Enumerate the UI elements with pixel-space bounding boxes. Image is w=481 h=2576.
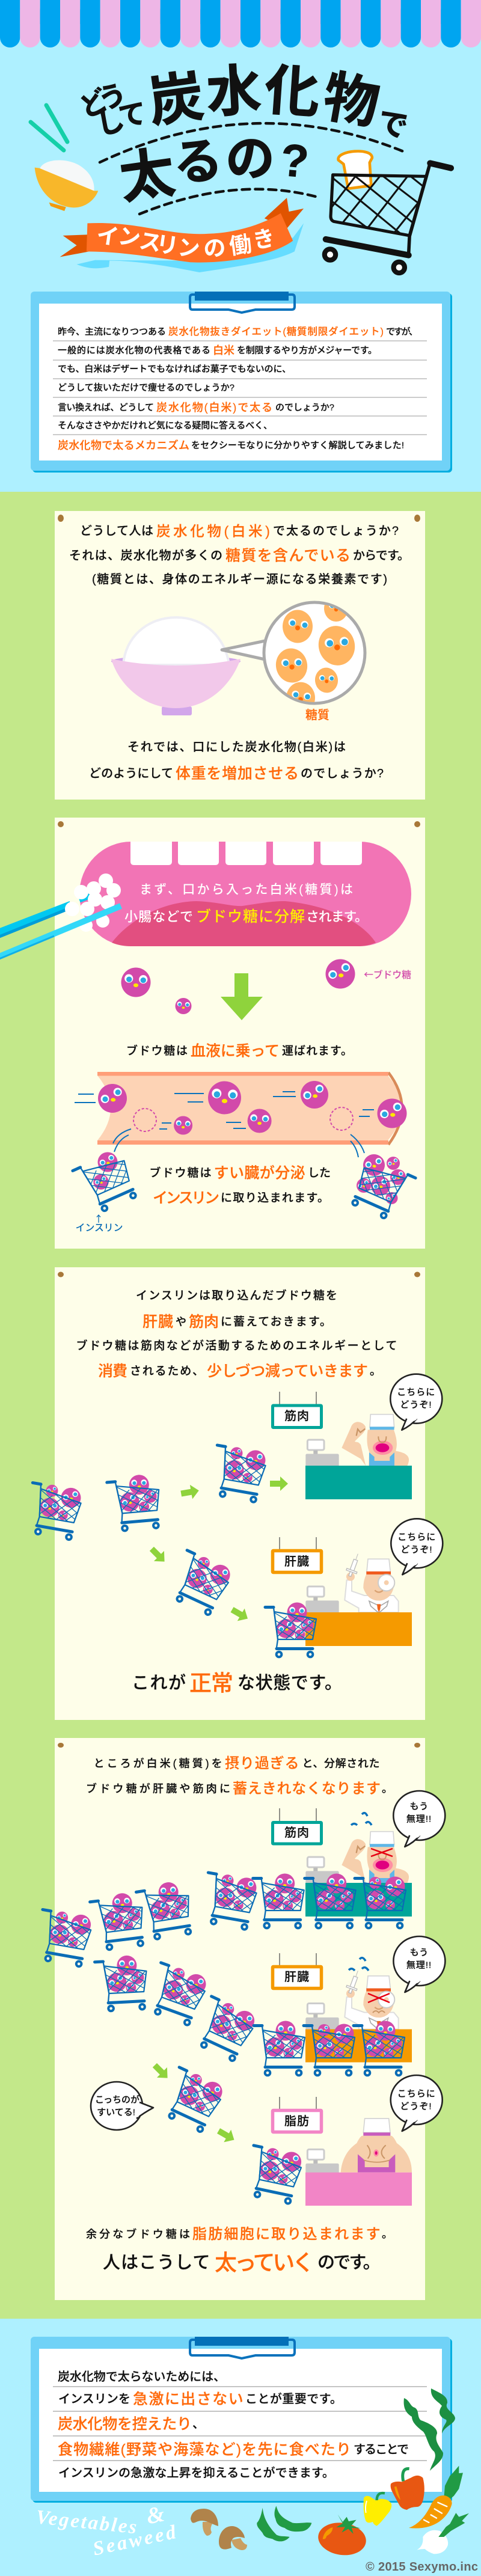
speech bubble: this way: どうぞ! [400, 1545, 433, 1555]
text block: why: 糖質を含んでいる [225, 547, 351, 564]
text block: why: からです。 [353, 549, 409, 563]
text block: question: どのようにして [89, 766, 173, 780]
intro text: 昨今、主流になりつつある [58, 327, 166, 337]
advice text: 炭水化物で太らないためには、 [58, 2370, 225, 2384]
title: し [94, 105, 127, 141]
label: sugar: 糖質 [305, 708, 329, 722]
speech bubble: no more: もう [410, 1801, 429, 1812]
ribbon: insulin subtitle: ン [177, 235, 201, 262]
panel: intro clipboard [31, 292, 452, 473]
text: this is normal [132, 1671, 342, 1695]
speech bubble: this way [391, 1519, 443, 1574]
speech bubble: this way: どうぞ! [400, 2102, 432, 2111]
icon: carrot [409, 2466, 463, 2529]
sign: liver: 肝臓 [284, 1970, 310, 1984]
intro text: 白米 [213, 344, 234, 356]
text block: question [89, 740, 384, 782]
title: 炭 [144, 66, 208, 134]
text block: why [69, 523, 409, 586]
title [75, 60, 411, 210]
cart queue row 3 [158, 2064, 311, 2206]
awning stripes [0, 0, 481, 47]
label: insulin: ↑ [94, 1212, 103, 1225]
arrows [150, 2060, 237, 2146]
ribbon: insulin subtitle: イ [95, 222, 120, 250]
intro text: をセクシーモなりに分かりやすく解説してみました! [191, 440, 404, 451]
text block: storage: 筋肉 [189, 1314, 219, 1330]
text block: taken up by insulin: インスリン [153, 1190, 219, 1207]
text block: why: (糖質とは、身体のエネルギー源になる栄養素です) [92, 572, 387, 586]
text block: overeating: ところが白米(糖質)を [94, 1757, 222, 1770]
sign: muscle: 筋肉 [284, 1409, 310, 1423]
sign: muscle [273, 1808, 321, 1844]
glucose characters [121, 959, 355, 1014]
text block: digestion into glucose: ブドウ糖に分解 [196, 908, 305, 925]
icon: mushrooms [191, 2509, 247, 2550]
carts flow [24, 1442, 323, 1657]
sign: fat [273, 2097, 321, 2132]
intro text: 炭水化物抜きダイエット(糖質制限ダイエット) [168, 325, 384, 337]
text block: getting fat: 余分なブドウ糖は [86, 2228, 190, 2241]
text block: getting fat: のです。 [317, 2253, 381, 2272]
arrow: down [221, 973, 263, 1020]
text: this is normal: 正常 [189, 1671, 233, 1695]
text block: storage [76, 1288, 397, 1380]
speech bubble: this one is empty: こっちのが [95, 2094, 139, 2105]
icon: mouth [79, 842, 411, 946]
icon: seaweed [404, 2388, 455, 2471]
text block: taken up by insulin: した [308, 1167, 331, 1179]
text: this is normal: な状態です。 [237, 1673, 342, 1693]
text block: getting fat: 脂肪細胞に取り込まれます [192, 2226, 381, 2242]
decorative script: Vegetables and Seaweed: Vegetables [35, 2506, 138, 2538]
title: ? [278, 135, 311, 188]
speech bubble: this one is empty: すいてる! [97, 2108, 135, 2117]
title: 水 [204, 60, 263, 124]
text block: overeating: と、分解された [302, 1758, 380, 1770]
speech bubble: this way: こちらに [397, 1532, 436, 1543]
ribbon: insulin subtitle: 働 [228, 231, 253, 259]
intro text: どうして抜いただけで痩せるのでしょうか? [58, 382, 234, 393]
text block: overeating: 摂り過ぎる [225, 1755, 299, 1772]
text block: getting fat: 太っていく [215, 2251, 314, 2275]
panel: digestion [0, 818, 425, 1249]
text block: storage: や [176, 1316, 186, 1328]
advice text: 急激に出さない [133, 2391, 244, 2408]
advice text: 炭水化物を控えたり [58, 2416, 192, 2433]
sign: muscle: 筋肉 [284, 1826, 310, 1840]
muscle clerk at counter [305, 1415, 412, 1499]
text block: carried by blood: 運ばれます。 [282, 1044, 352, 1057]
title: る [171, 133, 225, 192]
title: 太 [115, 142, 179, 210]
ribbon: insulin subtitle [60, 198, 304, 272]
advice text: ことが重要です。 [245, 2392, 342, 2406]
speech bubble: no more: もう [410, 1948, 429, 1957]
text block: getting fat: 。 [382, 2229, 393, 2241]
ribbon: insulin subtitle: リ [155, 231, 180, 259]
ribbon: insulin subtitle: ス [137, 228, 164, 256]
text block: taken up by insulin: ブドウ糖は [149, 1166, 212, 1179]
icon: insulin cart left [72, 1144, 146, 1216]
text block: digestion into glucose [124, 883, 368, 925]
title: で [374, 105, 411, 144]
speech bubble: this way: こちらに [397, 1387, 435, 1397]
title: の [224, 131, 276, 188]
panel: overeating [34, 1738, 445, 2300]
text block: taken up by insulin: に取り込まれます。 [221, 1192, 329, 1205]
cart queue row 1 [34, 1870, 412, 1969]
text block: getting fat [86, 2226, 393, 2275]
text block: carried by blood: 血液に乗って [191, 1042, 280, 1059]
text block: storage: 少しづつ減っていきます [207, 1363, 368, 1380]
panel: advice clipboard [31, 2337, 452, 2503]
label: insulin [76, 1212, 123, 1234]
icon: yellow pepper [364, 2493, 391, 2526]
text block: question: それでは、口にした炭水化物(白米)は [127, 740, 346, 754]
intro text [58, 325, 418, 451]
advice text: 食物繊維(野菜や海藻など)を先に食べたり [58, 2441, 351, 2458]
advice text: インスリンの急激な上昇を抑えることができます。 [58, 2466, 334, 2480]
magnifier bubble with sugar faces [220, 601, 367, 705]
intro text: 炭水化物で太るメカニズム [58, 439, 189, 451]
panel: why carbs [55, 511, 425, 800]
icon: insulin cart right [343, 1151, 417, 1223]
text block: storage: ブドウ糖は筋肉などが活動するためのエネルギーとして [76, 1338, 397, 1353]
text block: storage: に蓄えておきます。 [221, 1315, 331, 1329]
intro text: 一般的には炭水化物の代表格である [58, 345, 210, 356]
text block: question: 体重を増加させる [176, 765, 299, 782]
speech bubble: this one is empty [91, 2082, 153, 2130]
text block: why: それは、炭水化物が多くの [69, 548, 222, 563]
ribbon: insulin subtitle: ン [116, 224, 142, 251]
text block: taken up by insulin [149, 1165, 331, 1207]
text block: storage: インスリンは取り込んだブドウ糖を [136, 1288, 337, 1302]
arrows [147, 1476, 288, 1625]
panel: normal state [24, 1267, 443, 1720]
text block: overeating [86, 1755, 393, 1797]
speech bubble: no more: 無理!! [406, 1814, 432, 1824]
intro text: を制限するやり方がメジャーです。 [237, 345, 377, 356]
title: 物 [319, 66, 384, 136]
text block: storage: 消費 [98, 1363, 127, 1380]
advice text [58, 2370, 409, 2480]
intro text: ですが、 [386, 326, 418, 337]
clipboard clip [190, 2337, 295, 2358]
sign: liver [273, 1537, 321, 1573]
title: う [94, 78, 130, 116]
icon: chopsticks [31, 105, 67, 150]
speech bubble: no more [393, 1791, 445, 1847]
speech bubble: this way [390, 1374, 442, 1430]
ribbon: insulin subtitle: の [203, 236, 227, 261]
advice text: 、 [192, 2418, 204, 2431]
cart queue row 2 [94, 1954, 411, 2075]
title: て [117, 97, 148, 132]
icon: radish [417, 2513, 469, 2554]
intro text: 炭水化物(白米)で太る [156, 402, 272, 414]
speech bubble: this way: どうぞ! [400, 1400, 432, 1410]
doctor clerk at counter [305, 1552, 412, 1646]
text: this is normal: これが [132, 1673, 186, 1693]
text block: why: どうして人は [80, 524, 153, 537]
clipboard clip [190, 292, 295, 313]
text block: digestion into glucose: されます。 [306, 909, 368, 925]
label: insulin: インスリン [76, 1223, 123, 1234]
sign: liver: 肝臓 [284, 1555, 310, 1568]
sign: muscle [273, 1392, 321, 1427]
icon: red pepper [391, 2469, 424, 2510]
label: glucose: ←ブドウ糖 [364, 967, 411, 981]
advice text: インスリンを [58, 2392, 130, 2406]
intro text: のでしょうか? [275, 403, 334, 412]
background: green middle band [0, 492, 481, 2319]
decorative script: Vegetables and Seaweed: & [144, 2501, 167, 2530]
muscle clerk overwhelmed [305, 1813, 412, 1917]
icon: chopsticks with rice [0, 873, 121, 960]
intro text: でも、白米はデザートでもなければお菓子でもないのに、 [58, 363, 291, 374]
icon: rice bowl [35, 161, 98, 211]
text block: carried by blood: ブドウ糖は [126, 1044, 188, 1057]
blood vessel [75, 1072, 406, 1157]
intro text: 言い換えれば、どうして [58, 402, 154, 412]
text block: why: 炭水化物(白米) [156, 523, 270, 539]
intro text: そんなささやかだけれど気になる疑問に答えるべく、 [58, 420, 272, 430]
text block: overeating: 。 [382, 1783, 393, 1795]
sign: liver [273, 1953, 321, 1989]
text block: why: で太るのでしょうか? [273, 524, 399, 537]
text block: overeating: 蓄えきれなくなります [233, 1781, 381, 1797]
text block: overeating: ブドウ糖が肝臓や筋肉に [86, 1782, 230, 1795]
advice text: することで [354, 2443, 409, 2456]
ribbon: insulin subtitle: き [251, 225, 277, 254]
text block: question: のでしょうか? [301, 767, 384, 780]
speech bubble: no more: 無理!! [406, 1960, 432, 1971]
text block: storage: 。 [370, 1365, 381, 1378]
background: top sky blue [0, 0, 481, 493]
title: ど [75, 84, 113, 124]
speech bubble: this way [391, 2075, 443, 2131]
decorative script: Vegetables and Seaweed: Seaweed [91, 2521, 178, 2560]
icon: tomato [316, 2515, 368, 2558]
speech bubble: no more [393, 1936, 445, 1992]
text block: storage: 肝臓 [142, 1314, 173, 1330]
icon: vegetables [257, 2506, 311, 2541]
title: 化 [263, 60, 322, 124]
fat clerk at counter [305, 2119, 412, 2206]
icon: shopping cart with bread [325, 151, 451, 273]
text block: digestion into glucose: まず、口から入った白米(糖質)は [139, 883, 353, 897]
decorative script: Vegetables and Seaweed [35, 2501, 178, 2560]
text block: getting fat: 人はこうして [103, 2253, 210, 2272]
copyright: © 2015 Sexymo.inc [366, 2560, 478, 2574]
dashed arcs under title [100, 123, 403, 214]
text block: digestion into glucose: 小腸などで [124, 909, 193, 925]
icon: edamame [257, 2506, 311, 2541]
sign: fat: 脂肪 [284, 2114, 310, 2128]
text block: storage: されるため、 [130, 1365, 204, 1378]
text block: taken up by insulin: すい臓が分泌 [214, 1165, 305, 1182]
icon: bowl of rice [111, 617, 240, 715]
doctor clerk overwhelmed [305, 1958, 412, 2062]
speech bubble: this way: こちらに [397, 2088, 436, 2099]
background: bottom sky blue [0, 2319, 481, 2576]
text block: carried by blood [126, 1042, 352, 1059]
